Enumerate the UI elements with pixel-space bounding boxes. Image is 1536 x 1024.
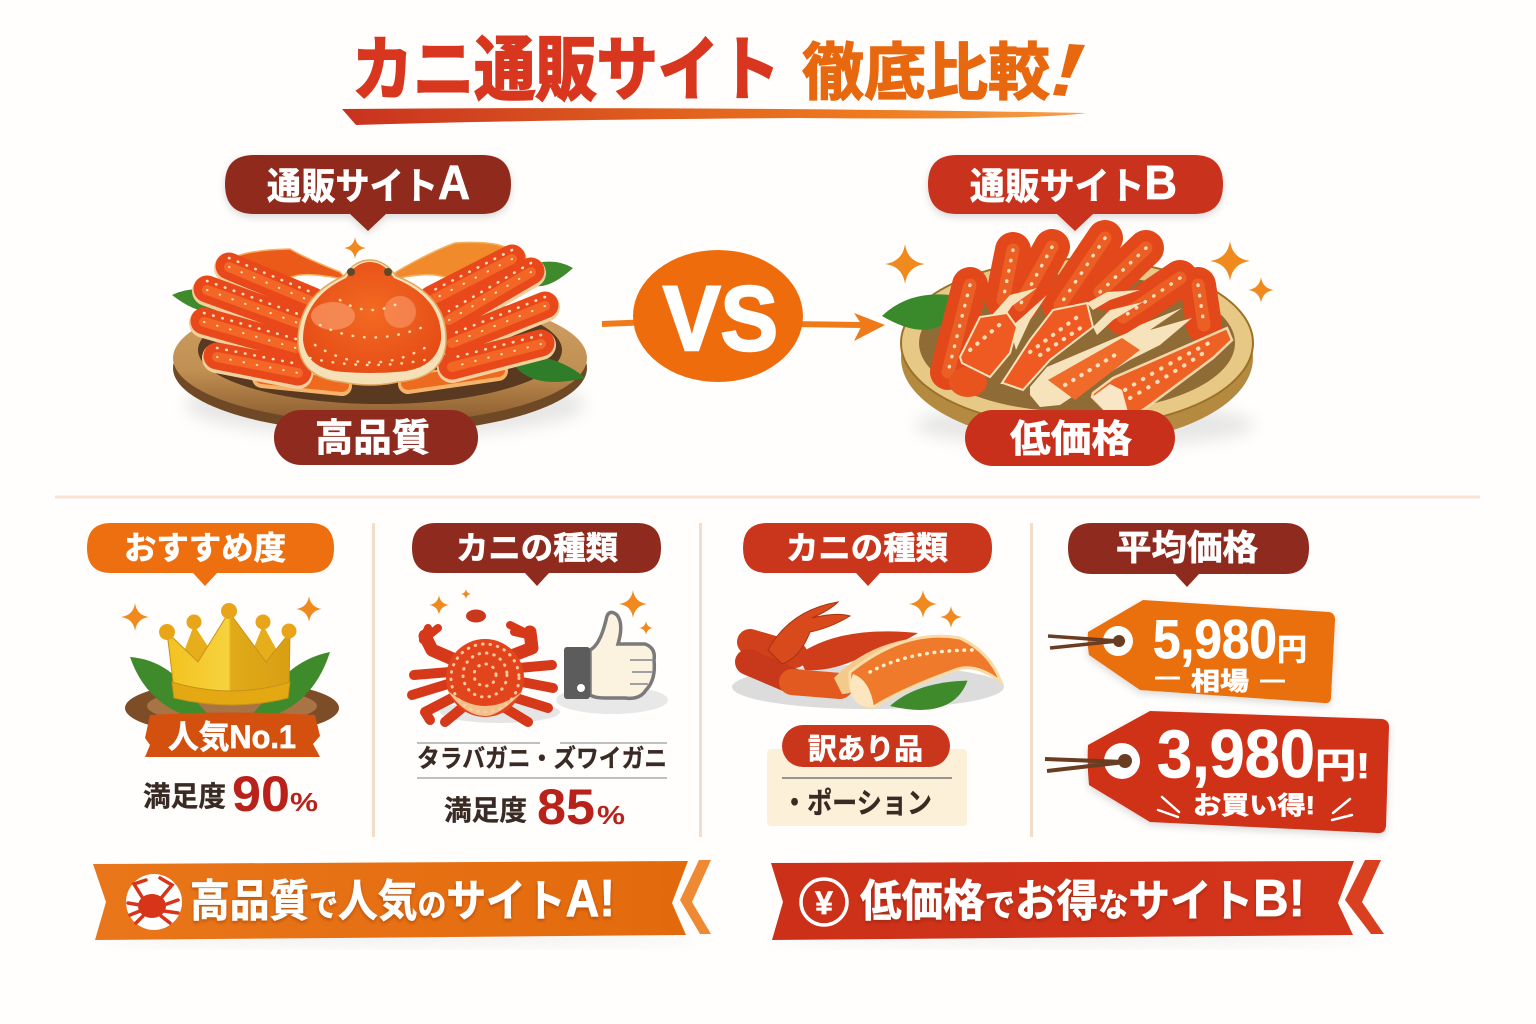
site A speech bubble bbox=[225, 155, 511, 231]
panel: site A bbox=[171, 155, 587, 465]
vs emblem with arrow bbox=[602, 250, 885, 382]
label pill: outlet: 訳あり品 bbox=[808, 734, 923, 766]
price tag 5,980 bbox=[1048, 600, 1335, 703]
price tag 3,980: 3,980 bbox=[1157, 716, 1315, 792]
satisfaction 90%: 満足度 bbox=[143, 781, 226, 812]
upper claws bbox=[226, 249, 347, 281]
heading: average price: 平均価格 bbox=[1116, 529, 1258, 568]
crab on wooden plate bbox=[171, 242, 587, 437]
satisfaction 90% bbox=[143, 766, 318, 822]
title bbox=[352, 31, 1085, 109]
claws illustration bbox=[732, 602, 1004, 715]
icon: crab bbox=[412, 625, 560, 723]
satisfaction 90%: % bbox=[290, 787, 318, 817]
heading: crab types bbox=[412, 523, 661, 586]
icons: sparkles bbox=[121, 596, 322, 631]
crab claws in basket bbox=[882, 238, 1255, 447]
icon: yen badge: ¥ bbox=[815, 885, 833, 921]
price tag 3,980: お買い得! bbox=[1193, 792, 1315, 820]
banner: site B bbox=[770, 860, 1384, 944]
icon: thumbs up bbox=[556, 612, 668, 714]
banner text A: 高品質で人気のサイトA! bbox=[190, 870, 615, 928]
heading: crab types bbox=[743, 523, 992, 586]
vs emblem with arrow: VS bbox=[663, 268, 778, 370]
icon: crown on plate bbox=[125, 603, 339, 735]
satisfaction 85% bbox=[444, 779, 625, 835]
info box bbox=[767, 749, 967, 826]
heading: recommendation: おすすめ度 bbox=[124, 530, 286, 566]
site B speech bubble: 通販サイトB bbox=[970, 157, 1177, 210]
satisfaction 90%: 90 bbox=[232, 766, 290, 822]
satisfaction 85%: % bbox=[597, 800, 625, 830]
price tag 3,980 bbox=[1045, 711, 1389, 833]
icons: sparkles bbox=[909, 590, 962, 628]
front leg bbox=[1092, 328, 1232, 414]
title: カニ通販サイト bbox=[352, 31, 780, 109]
label pill: low price: 低価格 bbox=[1010, 419, 1132, 461]
icon: yen badge bbox=[801, 879, 847, 925]
heading: recommendation bbox=[87, 523, 334, 586]
heading: average price bbox=[1068, 523, 1309, 587]
satisfaction 85%: 満足度 bbox=[444, 795, 527, 826]
panel: average price bbox=[1045, 523, 1389, 833]
panel: site B bbox=[882, 155, 1274, 466]
heading: crab types: カニの種類 bbox=[786, 530, 948, 566]
price tag 5,980: 円 bbox=[1277, 634, 1307, 667]
title underline bbox=[342, 108, 1086, 125]
label pill: low price bbox=[965, 410, 1175, 466]
banner text B: 低価格でお得なサイトB! bbox=[860, 870, 1305, 928]
icons: sparkles bbox=[885, 241, 1274, 303]
label pill: outlet bbox=[782, 725, 950, 767]
panel: crab types A bbox=[412, 523, 668, 835]
label pill: high quality bbox=[274, 410, 478, 465]
price tag 3,980: 円! bbox=[1315, 747, 1370, 786]
price tag 5,980: 相場 bbox=[1191, 668, 1249, 696]
front claw 2 bbox=[1002, 290, 1143, 390]
icon: sparkle bbox=[344, 237, 366, 259]
title: 徹底比較 bbox=[802, 39, 1050, 108]
site B speech bubble bbox=[928, 155, 1223, 231]
info box: ・ポーション bbox=[782, 787, 932, 820]
crab names: タラバガニ・ズワイガニ bbox=[417, 744, 667, 773]
panel: crab types B bbox=[732, 523, 1004, 826]
icons: sparkles bbox=[429, 589, 653, 635]
divider bbox=[55, 496, 1480, 498]
satisfaction 85%: 85 bbox=[537, 779, 595, 835]
price tag 5,980: 5,980 bbox=[1153, 608, 1277, 670]
ribbon: popularity No.1 bbox=[145, 712, 320, 757]
panel: recommendation bbox=[87, 523, 339, 822]
banner: site A bbox=[93, 860, 711, 944]
front claw 3 bbox=[1030, 308, 1192, 407]
label pill: high quality: 高品質 bbox=[315, 418, 430, 460]
front claw 1 bbox=[949, 288, 1047, 397]
icon: crab badge bbox=[126, 874, 182, 930]
ribbon: popularity No.1: 人気No.1 bbox=[168, 719, 296, 755]
heading: crab types: カニの種類 bbox=[456, 530, 618, 566]
site A speech bubble: 通販サイトA bbox=[267, 157, 470, 210]
